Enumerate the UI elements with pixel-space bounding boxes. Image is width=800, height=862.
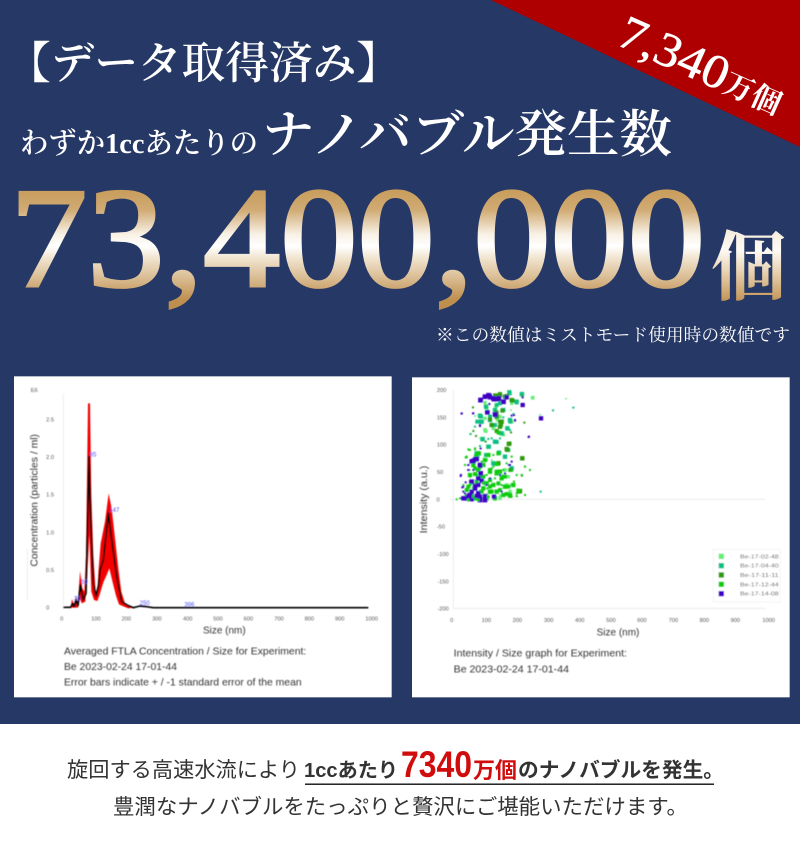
x axis title: Size (nm): [597, 627, 639, 638]
y axis labels: 150: [437, 415, 446, 421]
y axis labels: 50: [437, 470, 443, 476]
bottom text line 1: 旋回する高速水流により: [67, 759, 300, 782]
subheading: nanobubble count per 1cc: わずか1ccあたりの: [20, 127, 258, 160]
bottom text line 1: 万個: [473, 758, 517, 783]
ribbon text: 7,340万個: 万個: [718, 67, 786, 122]
mean line: [63, 457, 368, 608]
y axis labels: -50: [437, 525, 445, 531]
bottom text line 1: [67, 744, 724, 785]
y axis labels: 0: [437, 497, 440, 503]
x axis labels: 200: [513, 618, 522, 624]
note: ※この数値はミストモード使用時の数値です: [436, 325, 790, 345]
bottom text line 1: のナノバブルを発生。: [518, 758, 724, 782]
x axis labels: 400: [183, 617, 192, 623]
chart axes: [27, 393, 63, 608]
legend: Be-17-04-40: [740, 564, 779, 570]
red error band: [63, 403, 133, 608]
x axis labels: 300: [544, 618, 553, 624]
y axis labels: 200: [437, 388, 446, 394]
chart caption: Be 2023-02-24 17-01-44: [64, 662, 178, 673]
peak labels: [74, 452, 195, 608]
ribbon text: 7,340万個: 7,340: [611, 6, 738, 101]
x axis labels: 1000: [762, 618, 775, 624]
legend: Be-17-11-11: [740, 573, 779, 579]
bottom text line 2: 豊潤なナノバブルをたっぷりと贅沢にご堪能いただけます。: [113, 796, 688, 819]
y axis labels: E6: [31, 388, 38, 394]
x axis labels: 0: [60, 617, 63, 623]
y axis labels: -200: [437, 607, 449, 613]
x axis labels: 800: [700, 618, 709, 624]
panel: intensity scatter chart: [412, 377, 790, 697]
chart caption: Averaged FTLA Concentration / Size for Experiment:: [64, 646, 306, 657]
peak labels: 85: [90, 452, 97, 458]
heading: data acquired: 【データ取得済み】: [7, 39, 400, 88]
underline: [305, 784, 714, 785]
peak labels: 59: [81, 580, 88, 586]
y axis labels: [31, 388, 54, 612]
x axis labels: 700: [274, 617, 284, 623]
y axis labels: 1.5: [46, 493, 54, 499]
y axis labels: 0: [46, 606, 49, 612]
peak labels: 250: [140, 601, 150, 607]
y axis labels: 1.0: [46, 530, 54, 536]
x axis labels: 900: [731, 618, 740, 624]
unit: 個: 個: [711, 227, 787, 311]
legend: Be-17-02-48: [740, 554, 779, 560]
ribbon text: 7,340万個: [611, 6, 793, 126]
subheading: nanobubble count per 1cc: ナノバブル発生数: [262, 108, 672, 164]
y axis labels: [437, 388, 449, 613]
panel: concentration chart: [14, 376, 392, 697]
x axis labels: 500: [213, 617, 223, 623]
y axis labels: 100: [437, 443, 446, 449]
y axis title: Concentration (particles / ml): [30, 434, 41, 567]
x axis labels: 500: [606, 618, 616, 624]
x axis labels: 600: [244, 617, 253, 623]
scatter caption: Intensity / Size graph for Experiment:: [454, 648, 627, 659]
subheading: nanobubble count per 1cc: [20, 108, 672, 164]
x axis labels: 800: [305, 617, 314, 623]
chart caption: [64, 646, 306, 688]
scatter points: [457, 392, 573, 500]
x axis labels: [450, 618, 775, 624]
chart caption: Error bars indicate + / -1 standard error of the mean: [64, 677, 302, 688]
x axis title: Size (nm): [203, 626, 246, 637]
y axis title: Intensity (a.u.): [419, 466, 430, 533]
x axis labels: 400: [575, 618, 584, 624]
bottom white panel: [0, 724, 800, 862]
x axis labels: 700: [669, 618, 678, 624]
peak labels: 147: [109, 508, 120, 514]
peak labels: 35: [74, 597, 81, 603]
legend: Be-17-14-08: [740, 592, 779, 598]
x axis labels: 0: [450, 618, 453, 624]
x axis labels: 1000: [365, 617, 378, 623]
x axis labels: [60, 617, 378, 623]
legend: Be-17-12-44: [740, 582, 779, 588]
scatter axes: [450, 390, 765, 608]
x axis labels: 300: [152, 617, 162, 623]
big gold number: 73,400,000: [10, 159, 705, 317]
scatter caption: Be 2023-02-24 17-01-44: [454, 664, 570, 675]
x axis labels: 200: [122, 617, 131, 623]
y axis labels: 2.5: [46, 417, 54, 423]
x axis labels: 100: [91, 617, 101, 623]
y axis labels: 2.0: [46, 455, 54, 461]
x axis labels: 900: [335, 617, 344, 623]
legend: [713, 549, 780, 602]
y axis labels: -100: [437, 552, 449, 558]
bottom text line 1: 7340: [401, 744, 472, 785]
y axis labels: -150: [437, 579, 449, 585]
scatter body: [419, 388, 780, 675]
chart body: [27, 388, 378, 688]
peak labels: 396: [184, 602, 195, 608]
scatter caption: [454, 648, 627, 675]
y axis labels: 0.5: [46, 568, 54, 574]
bottom text line 1: 1ccあたり: [304, 759, 398, 782]
x axis labels: 100: [482, 618, 491, 624]
red corner ribbon: [491, 0, 800, 147]
x axis labels: 600: [637, 618, 647, 624]
